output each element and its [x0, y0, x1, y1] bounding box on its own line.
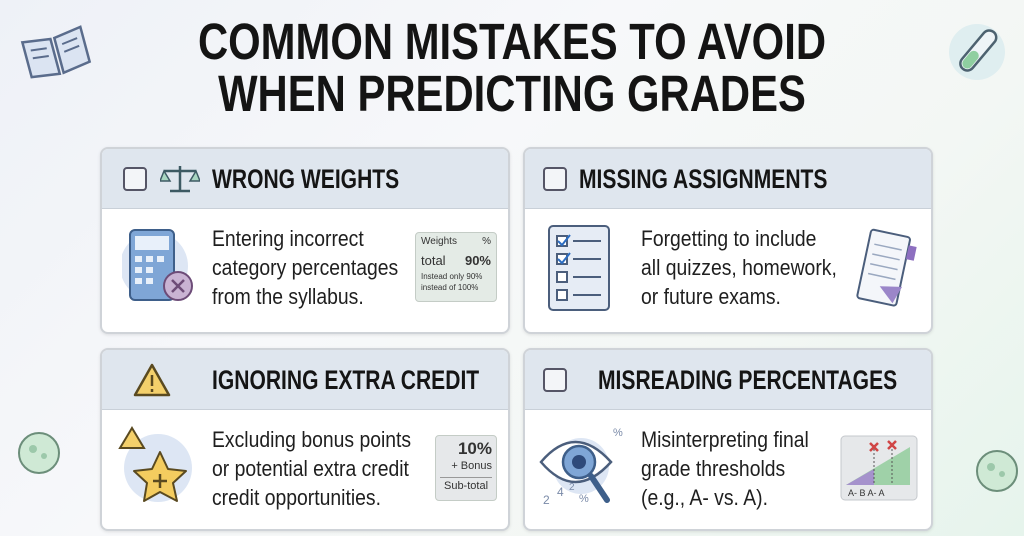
panel: ignoring extra credit	[100, 348, 510, 531]
icon: star plus	[118, 426, 192, 502]
icon: checklist	[548, 225, 610, 311]
header: misreading percentages: MISREADING PERCENTAGES	[598, 365, 897, 395]
text: wrong weights: category percentages	[212, 255, 398, 280]
text: extra credit	[212, 427, 411, 510]
text: missing assignments: or future exams.	[641, 284, 781, 309]
text: missing assignments: all quizzes, homework,	[641, 255, 837, 280]
text: extra credit: or potential extra credit	[212, 456, 409, 481]
header: misreading percentages	[525, 350, 931, 410]
icon: eye magnifier: 2	[543, 493, 550, 507]
mini table: weights: 90%	[465, 253, 491, 268]
header: wrong weights: WRONG WEIGHTS	[212, 164, 399, 194]
text: wrong weights: Entering incorrect	[212, 226, 364, 251]
icon: notebook	[856, 228, 917, 306]
panel: wrong weights	[100, 147, 510, 334]
text: extra credit: Excluding bonus points	[212, 427, 411, 452]
icon: petri dish right	[976, 450, 1018, 492]
mini: bonus: Sub-total	[444, 480, 488, 492]
mini table: weights: Instead only 90%	[421, 272, 482, 281]
text: wrong weights	[212, 226, 398, 309]
header: missing assignments	[525, 149, 931, 209]
icon: eye magnifier: 4	[557, 485, 564, 499]
title: WHEN PREDICTING GRADES	[218, 65, 806, 122]
icon: test tube	[949, 24, 1005, 80]
header: missing assignments: MISSING ASSIGNMENTS	[579, 164, 827, 194]
mini: bonus: 10%	[458, 439, 492, 458]
mini chart: grade thresholds: A- B A- A	[848, 488, 885, 498]
mini table: weights	[415, 232, 497, 302]
text: misreading: grade thresholds	[641, 456, 785, 481]
mini: bonus: + Bonus	[451, 460, 492, 472]
text: misreading: (e.g., A- vs. A).	[641, 485, 768, 510]
icon: eye magnifier: 2	[569, 482, 575, 493]
icon: broken calculator	[122, 229, 193, 301]
panel: misreading percentages	[523, 348, 933, 531]
mini table: weights: instead of 100%	[421, 283, 478, 292]
icon: eye magnifier: %	[579, 493, 589, 505]
icon: petri dish left	[18, 432, 60, 474]
mini table: weights: total	[421, 253, 446, 268]
text: wrong weights: from the syllabus.	[212, 284, 364, 309]
mini table: weights: %	[482, 236, 491, 247]
text: extra credit: credit opportunities.	[212, 485, 381, 510]
icon: book	[20, 25, 92, 78]
mini table: weights: Weights	[421, 236, 457, 247]
icon: eye magnifier: %	[613, 427, 623, 439]
text: misreading: Misinterpreting final	[641, 427, 809, 452]
text: missing assignments	[641, 226, 837, 309]
title	[198, 13, 826, 122]
icon: eye magnifier	[540, 427, 623, 507]
text: missing assignments: Forgetting to include	[641, 226, 816, 251]
header: wrong weights	[102, 149, 508, 209]
mini chart: grade thresholds	[840, 436, 918, 500]
panel: missing assignments	[523, 147, 933, 334]
header: ignoring extra credit: IGNORING EXTRA CREDIT	[212, 365, 479, 395]
title: COMMON MISTAKES TO AVOID	[198, 13, 826, 70]
text: misreading	[641, 427, 809, 510]
header: ignoring extra credit	[102, 350, 508, 410]
mini: bonus	[435, 435, 497, 501]
